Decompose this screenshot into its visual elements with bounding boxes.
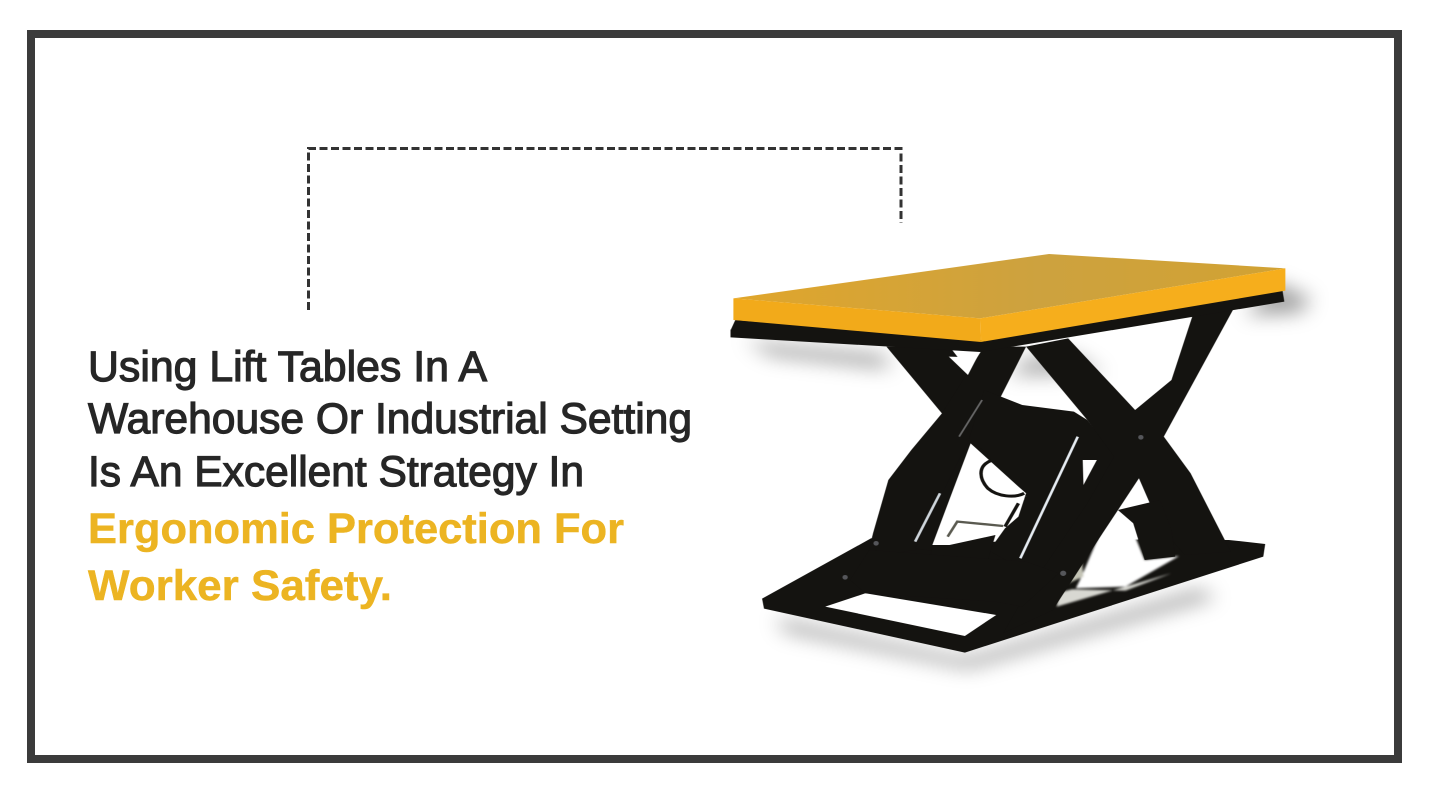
highlighted line 4: Ergonomic Protection For bbox=[88, 505, 624, 553]
cylinder highlight 1 bbox=[1020, 437, 1078, 558]
heading line 2: Warehouse Or Industrial Setting bbox=[88, 395, 692, 443]
mechanism opening bbox=[932, 443, 1026, 545]
cross member bbox=[850, 550, 1059, 607]
hydraulic cylinder 2 bbox=[915, 440, 988, 553]
platform front edge bbox=[980, 268, 1285, 342]
rear scissor arms bbox=[867, 347, 1116, 573]
hydraulic hose bbox=[981, 461, 1024, 527]
dashed connector line bbox=[308, 148, 901, 310]
open area inside base bbox=[1030, 500, 1179, 607]
shadows bbox=[747, 280, 1309, 670]
cylinder highlights bbox=[915, 400, 982, 542]
heading line 3: Is An Excellent Strategy In bbox=[88, 448, 584, 496]
highlighted line 5: Worker Safety. bbox=[88, 562, 392, 610]
gap behind rear arms bbox=[949, 357, 977, 375]
base frame bbox=[762, 538, 1265, 653]
platform top bbox=[733, 254, 1285, 318]
underside of platform bbox=[731, 290, 1284, 352]
heading line 1: Using Lift Tables In A bbox=[88, 343, 487, 391]
heading text bbox=[88, 343, 692, 610]
illustration: scissor lift table bbox=[731, 254, 1309, 670]
platform left edge bbox=[733, 298, 981, 342]
small gap beside cylinder bbox=[1083, 460, 1097, 485]
front scissor arms bbox=[1003, 303, 1237, 633]
interior linkage bbox=[930, 522, 1003, 560]
pivot bolts bbox=[842, 435, 1144, 580]
